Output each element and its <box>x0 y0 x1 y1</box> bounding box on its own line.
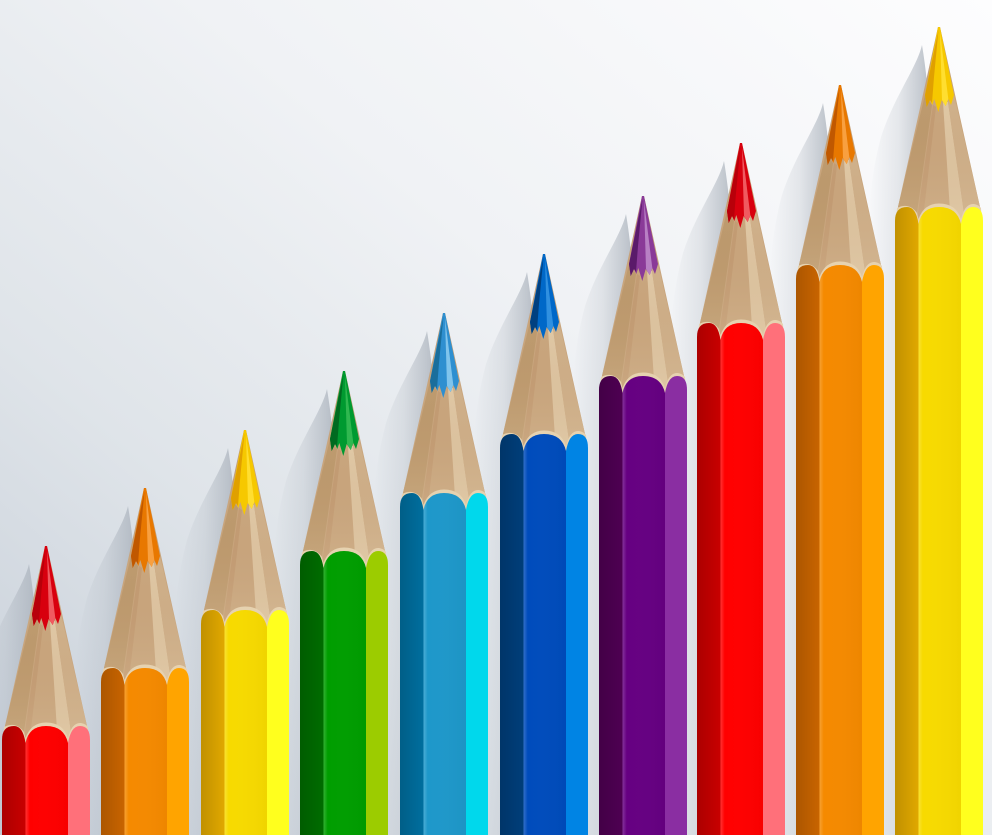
pencil 1: red <box>2 546 90 835</box>
pencil 5: light blue <box>400 313 488 835</box>
pencil 8: red <box>697 143 785 835</box>
pencil 10: yellow <box>895 27 983 835</box>
pencil 2: orange <box>101 488 189 835</box>
pencil 6: blue <box>500 254 588 835</box>
pencil 7: purple <box>599 196 687 835</box>
pencil 4: green <box>300 371 388 835</box>
pencil 3: yellow <box>201 430 289 835</box>
pencil 9: orange <box>796 85 884 835</box>
